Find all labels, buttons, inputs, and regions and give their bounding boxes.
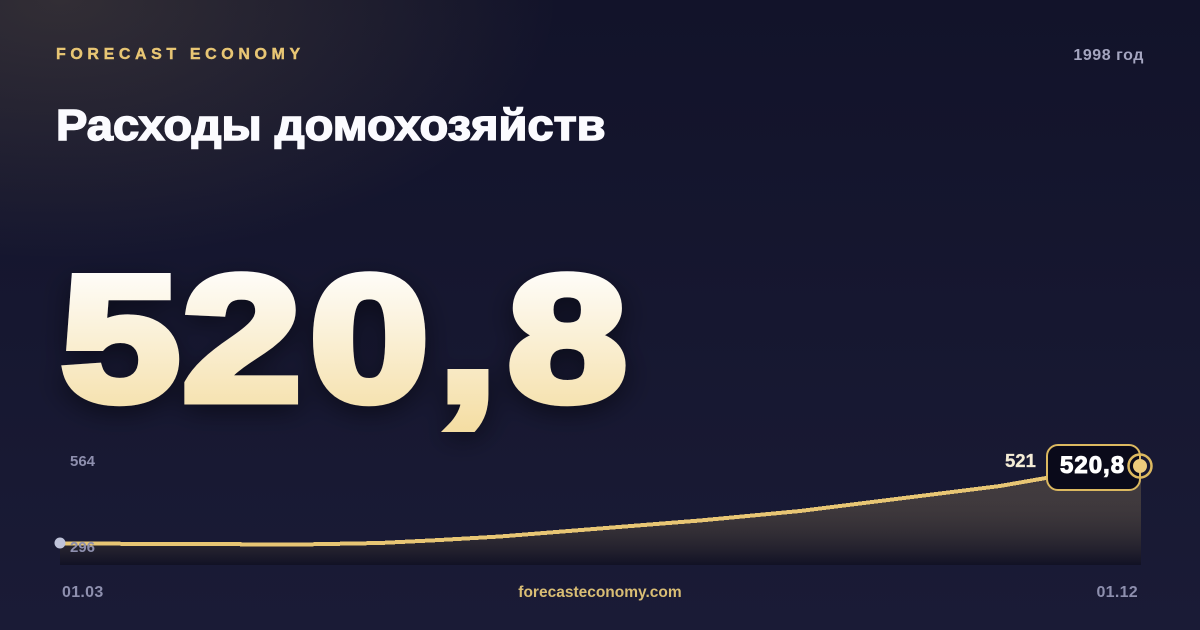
chart [54,445,1152,565]
start point [54,538,66,548]
title: Расходы домохозяйств [56,100,606,150]
value badge [1047,445,1140,490]
chart area fill [60,465,1141,565]
start date: 01.03 [62,584,104,601]
end date: 01.12 [1096,584,1138,601]
value badge: 520,8 [1060,452,1125,479]
year label: 1998 год [1073,47,1144,64]
brand label: FORECAST ECONOMY [56,46,305,63]
end marker [1128,454,1152,478]
big value: 520,8 [61,239,627,438]
axis max label: 564 [70,453,96,470]
last value label: 521 [1005,450,1036,471]
axis min label: 296 [70,539,95,556]
source url: forecasteconomy.com [518,584,682,601]
chart line [60,465,1141,544]
